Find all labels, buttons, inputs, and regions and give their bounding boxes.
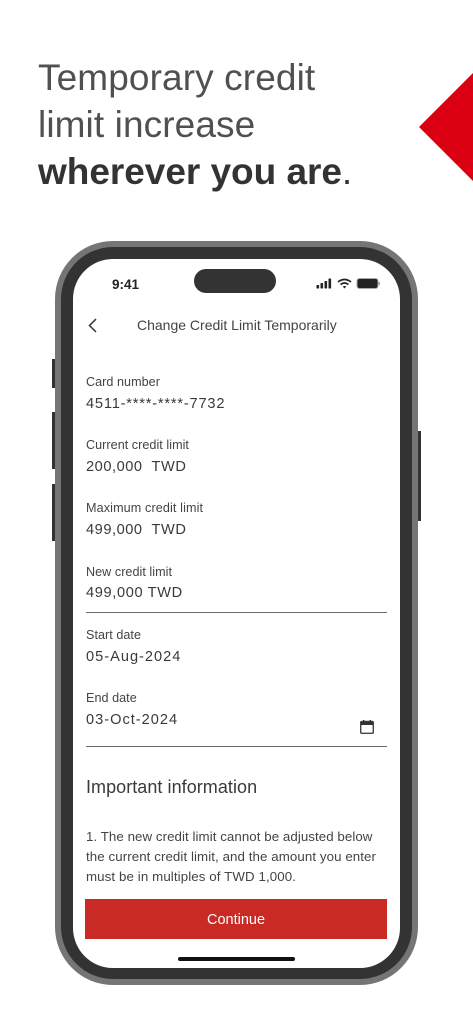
- phone mockup: [52, 241, 421, 985]
- icon: wifi: [338, 280, 351, 288]
- side button: volume down: [52, 484, 56, 541]
- title line 2: limit increase: [38, 104, 255, 145]
- line 2: the current credit limit, and the amount you enter: [86, 849, 376, 864]
- important information text: [86, 829, 376, 884]
- value: 4511-****-****-7732: [86, 396, 225, 412]
- label: Current credit limit: [86, 438, 189, 452]
- dynamic island: [194, 269, 276, 293]
- screen header title: Change Credit Limit Temporarily: [137, 317, 337, 333]
- side button: power: [417, 431, 421, 521]
- icon: calendar: [360, 720, 374, 734]
- field: end date: [86, 691, 387, 747]
- title line 1: Temporary credit: [38, 57, 315, 98]
- field: card number: [86, 375, 225, 412]
- phone outer frame: [55, 241, 418, 985]
- phone inner bezel: [61, 247, 412, 979]
- continue button: [85, 899, 387, 939]
- side button: volume up: [52, 412, 56, 469]
- label: End date: [86, 691, 137, 705]
- line 1: 1. The new credit limit cannot be adjusted below: [86, 829, 372, 844]
- value: 03-Oct-2024: [86, 712, 178, 728]
- value: 499,000 TWD: [86, 522, 186, 538]
- value: 499,000 TWD: [86, 585, 183, 601]
- status bar time: 9:41: [112, 277, 139, 292]
- phone screen: [73, 259, 400, 968]
- icon: battery: [357, 278, 380, 288]
- field: new credit limit: [86, 565, 387, 613]
- button label: Continue: [207, 912, 265, 928]
- status icons: [316, 278, 380, 289]
- value: 200,000 TWD: [86, 459, 186, 475]
- title: [38, 57, 352, 192]
- field: current credit limit: [86, 438, 189, 475]
- field: start date: [86, 628, 181, 665]
- field: maximum credit limit: [86, 501, 203, 538]
- home indicator: [178, 957, 295, 961]
- label: Start date: [86, 628, 141, 642]
- label: Maximum credit limit: [86, 501, 203, 515]
- red diamond decoration: [419, 73, 473, 181]
- label: New credit limit: [86, 565, 172, 579]
- title line 3 bold: wherever you are.: [38, 151, 352, 192]
- line 3: must be in multiples of TWD 1,000.: [86, 869, 296, 884]
- heading: important information: Important information: [86, 777, 257, 797]
- side button: mute: [52, 359, 56, 388]
- icon: back chevron: [88, 318, 96, 332]
- value: 05-Aug-2024: [86, 649, 181, 665]
- label: Card number: [86, 375, 160, 389]
- icon: signal: [316, 278, 331, 288]
